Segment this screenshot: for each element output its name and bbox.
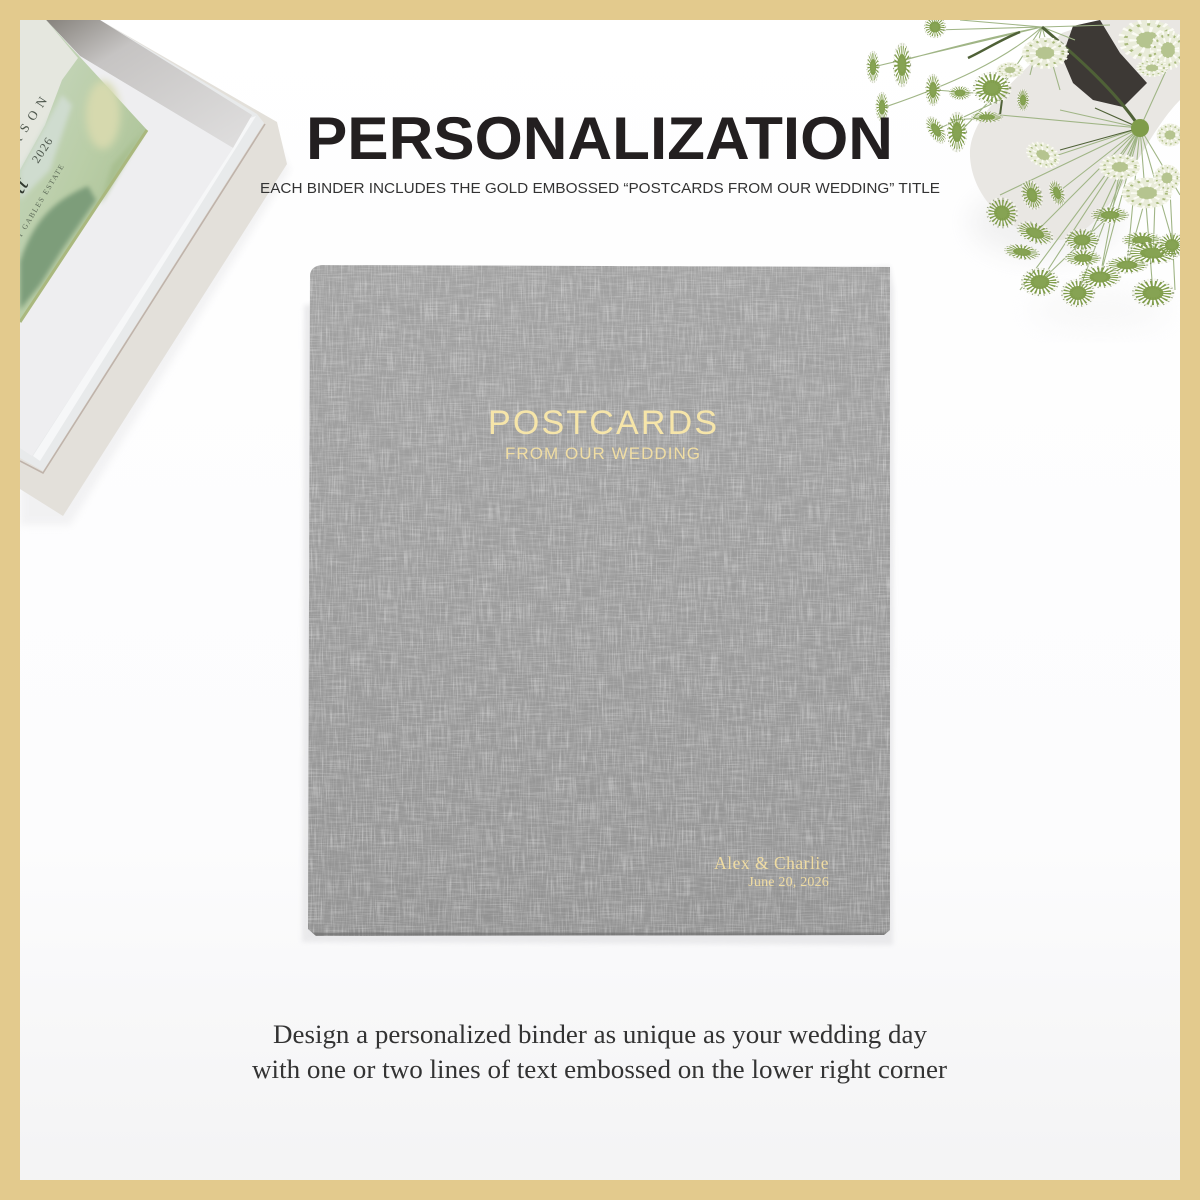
umbel clusters [867,17,1185,306]
linen texture [300,260,900,940]
watercolor postcard [5,20,147,322]
postcard text [20,96,64,237]
binder shadow [302,266,894,945]
box inner edge line [20,124,265,473]
box floor [46,20,232,298]
box lip highlight [33,116,256,461]
box inner lip [20,20,264,471]
title: PERSONALIZATION [306,105,893,172]
postcard text: tt [5,172,35,198]
postcard text: T GABLES ESTATE [15,162,66,239]
binder subtitle: FROM OUR WEDDING [505,444,700,463]
flowers and vase [867,17,1185,328]
box back wall [46,20,252,148]
description line 2: with one or two lines of text embossed on the lower right corner [252,1055,947,1084]
postcard text: RSON [8,89,54,148]
dark stems [968,27,1140,150]
binder title: POSTCARDS [488,404,717,442]
fine stems [873,20,1180,293]
postcard text: 2026 [29,134,56,166]
vase [970,20,1180,240]
description line 1: Design a personalized binder as unique as your wedding day [273,1020,927,1049]
box shadow [22,166,286,523]
names: Alex & Charlie [714,853,829,873]
subtitle: EACH BINDER INCLUDES THE GOLD EMBOSSED “POSTCARDS FROM OUR WEDDING” TITLE [260,181,940,197]
binder cover [308,265,890,936]
gift box with postcard [5,20,290,525]
linen binder [300,260,900,945]
box outer rim [20,20,287,516]
vase opening [1062,20,1147,107]
soft shadow under vase [978,206,1112,254]
hub of large umbel [1131,119,1149,137]
description [252,1020,947,1084]
date: June 20, 2026 [748,875,829,890]
